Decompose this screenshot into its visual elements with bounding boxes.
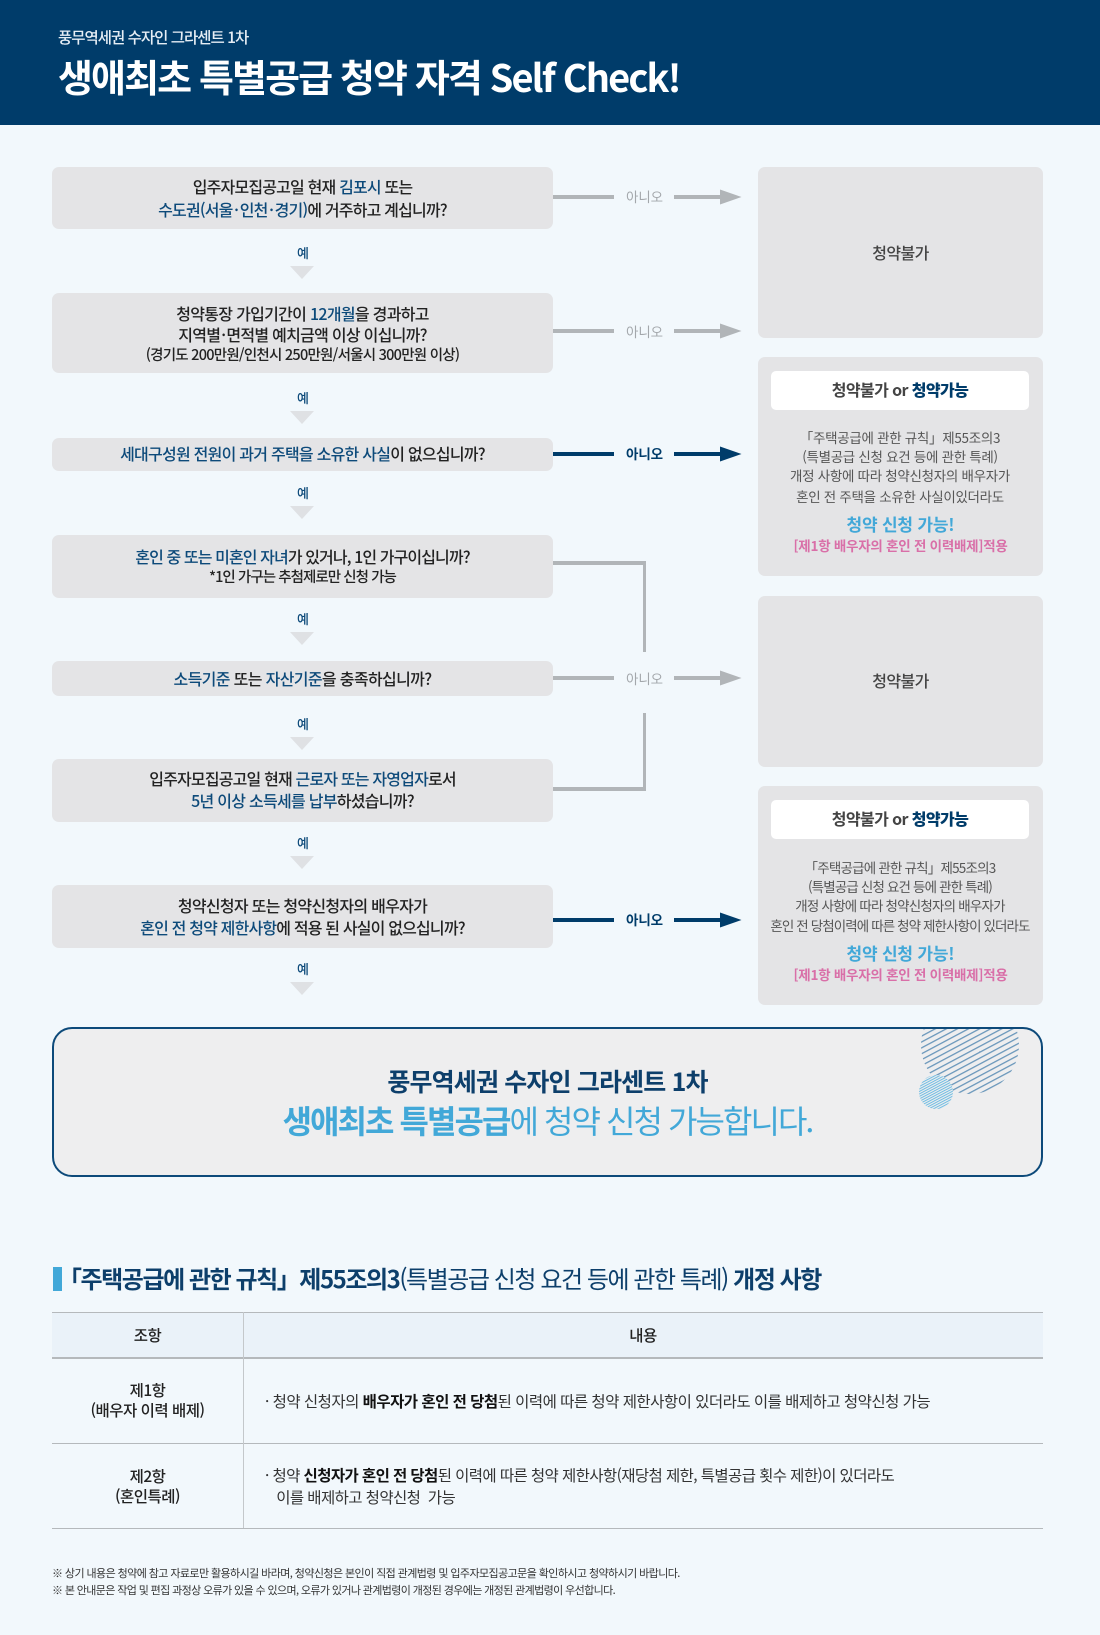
down arrow 2 [290,411,314,424]
question 2: (경기도 200만원/인천시 250만원/서울시 300만원 이상) [146,344,459,365]
down arrow 4 [290,632,314,645]
down arrow 3 [290,506,314,519]
rule explanation: (특별공급 신청 요건 등에 관한 특례) [802,446,998,466]
no arrow 7 [553,909,742,929]
result heading [771,800,1029,839]
result: ineligible 1 [758,167,1043,338]
row 1 clause: 제1항 [130,1379,165,1401]
yes label 1: 예 [297,243,309,262]
question 1: 입주자모집공고일 현재 김포시 또는 [193,174,412,198]
rule explanation: 혼인 전 당첨이력에 따른 청약 제한사항이 있더라도 [770,915,1030,935]
question 4 [52,535,553,598]
question 2: 지역별·면적별 예치금액 이상 이십니까? [178,322,427,346]
section heading: 「주택공급에 관한 규칙」제55조의3(특별공급 신청 요건 등에 관한 특례) 개정 사항 [58,1260,821,1295]
no arrow 5: 아니오 [626,668,663,688]
result: conditional 2 [758,786,1043,1005]
no arrow 2: 아니오 [626,321,663,341]
main title: 생애최초 특별공급 청약 자격 Self Check! [58,48,680,103]
footnotes [52,1565,680,1598]
row 2 clause: 제2항 [130,1465,165,1487]
decorative hatched circles [919,1029,1019,1109]
no arrow 1: 아니오 [626,186,663,206]
row 2 content: · 청약 신청자가 혼인 전 당첨된 이력에 따른 청약 제한사항(재당첨 제한, 특별공급 횟수 제한)이 있더라도 [265,1464,894,1486]
question 7: 혼인 전 청약 제한사항에 적용 된 사실이 없으십니까? [140,915,465,939]
rule explanation: 혼인 전 주택을 소유한 사실이있더라도 [796,486,1004,506]
down arrow 1 [290,266,314,279]
no arrow 2 [553,321,742,341]
yes label 5: 예 [297,714,309,733]
connector from question 4 [553,561,646,652]
result heading: 청약불가 or 청약가능 [832,806,968,830]
row 2 clause: (혼인특례) [115,1485,180,1507]
question 5: 소득기준 또는 자산기준을 충족하십니까? [174,666,431,690]
table header: content: 내용 [629,1324,657,1346]
footnotes: ※ 상기 내용은 청약에 참고 자료로만 활용하시길 바라며, 청약신청은 본인이 직접 관계법령 및 입주자모집공고문을 확인하시고 청약하시기 바랍니다. [52,1565,680,1581]
conclusion line 2: 생애최초 특별공급에 청약 신청 가능합니다. [283,1097,812,1143]
header subtitle: 풍무역세권 수자인 그라센트 1차 [58,26,248,48]
yes label 3: 예 [297,483,309,502]
yes label 4: 예 [297,609,309,628]
question 6: 5년 이상 소득세를 납부하셨습니까? [191,788,414,812]
down arrow 5 [290,737,314,750]
question 2 [52,293,553,373]
result: ineligible 2 [758,596,1043,767]
section heading marker [53,1267,62,1291]
result heading: 청약불가 or 청약가능 [832,377,968,401]
down arrow 6 [290,856,314,869]
question 7: 청약신청자 또는 청약신청자의 배우자가 [178,893,427,917]
result text: 청약불가 [872,668,929,692]
yes label 7: 예 [297,959,309,978]
clause note: [제1항 배우자의 혼인 전 이력배제]적용 [793,535,1008,555]
yes label 6: 예 [297,833,309,852]
rule explanation [790,427,1010,506]
row 2 clause [115,1465,180,1507]
result heading [771,371,1029,410]
result: conditional 1 [758,357,1043,576]
connector from question 6 [553,713,646,791]
table [0,1312,1100,1529]
no arrow 1 [553,186,742,206]
no arrow 7: 아니오 [626,909,663,929]
question 1: 수도권(서울·인천·경기)에 거주하고 계십니까? [158,197,447,221]
rule explanation: 개정 사항에 따라 청약신청자의 배우자가 [795,895,1005,915]
row 1 content: · 청약 신청자의 배우자가 혼인 전 당첨된 이력에 따른 청약 제한사항이 있더라도 이를 배제하고 청약신청 가능 [265,1390,930,1412]
conclusion line 1: 풍무역세권 수자인 그라센트 1차 [387,1063,708,1099]
clause note: [제1항 배우자의 혼인 전 이력배제]적용 [793,964,1008,984]
question 4: 혼인 중 또는 미혼인 자녀가 있거나, 1인 가구이십니까? [135,544,470,568]
eligible highlight: 청약 신청 가능! [847,511,954,536]
question 1 [52,167,553,229]
yes label 2: 예 [297,388,309,407]
row 2 content: 이를 배제하고 청약신청 가능 [276,1486,455,1508]
eligible highlight: 청약 신청 가능! [847,940,954,965]
no arrow 5 [553,668,742,688]
question 6: 입주자모집공고일 현재 근로자 또는 자영업자로서 [149,766,456,790]
question 7 [52,885,553,948]
question 4: *1인 가구는 추첨제로만 신청 가능 [209,566,396,587]
conclusion panel [52,1027,1043,1177]
row 1 clause [90,1379,205,1421]
question 3 [52,438,553,471]
header banner [0,0,1100,125]
rule explanation [770,857,1030,935]
result text: 청약불가 [872,240,929,264]
footnotes: ※ 본 안내문은 작업 및 편집 과정상 오류가 있을 수 있으며, 오류가 있거나 관계법령이 개정된 경우에는 개정된 관계법령이 우선합니다. [52,1582,615,1598]
no arrow 3: 아니오 [626,443,663,463]
down arrow 7 [290,982,314,995]
table header background [52,1312,1043,1358]
question 5 [52,661,553,696]
rule explanation: 개정 사항에 따라 청약신청자의 배우자가 [790,465,1010,485]
no arrow 3 [553,443,742,463]
rule explanation: (특별공급 신청 요건 등에 관한 특례) [808,876,992,896]
question 3: 세대구성원 전원이 과거 주택을 소유한 사실이 없으십니까? [120,441,485,465]
table header: clause: 조항 [134,1324,161,1346]
question 6 [52,759,553,822]
rule explanation: 「주택공급에 관한 규칙」제55조의3 [800,427,1000,447]
question 2: 청약통장 가입기간이 12개월을 경과하고 [176,301,429,325]
row 2 content [265,1464,894,1508]
row 1 clause: (배우자 이력 배제) [90,1399,205,1421]
rule explanation: 「주택공급에 관한 규칙」제55조의3 [805,857,995,877]
